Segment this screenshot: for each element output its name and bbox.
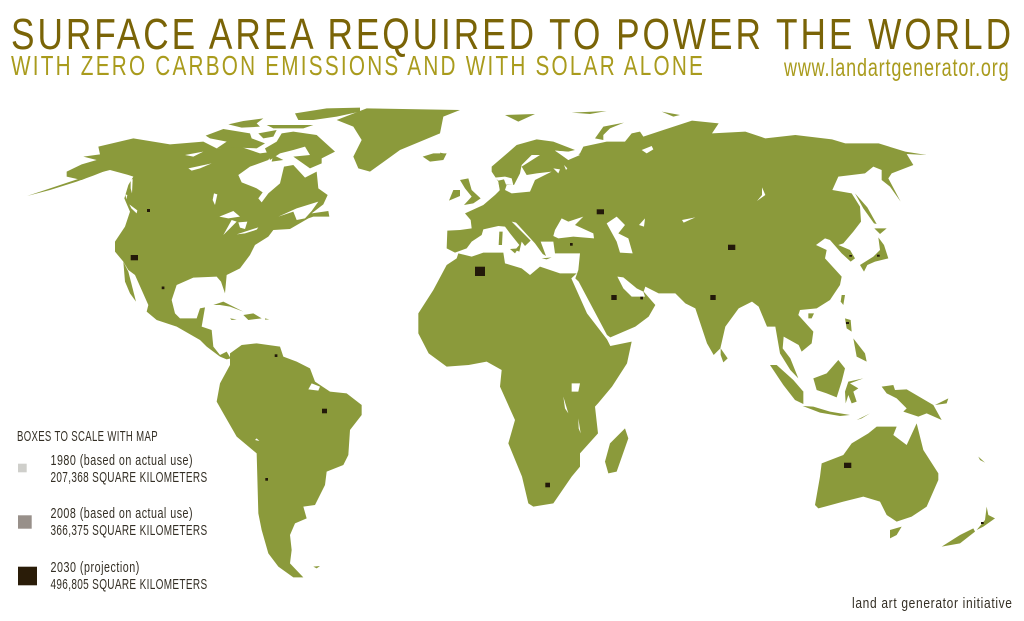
legend bbox=[17, 428, 207, 592]
Central Asian lakes bbox=[682, 187, 765, 223]
website url: www.landartgenerator.org bbox=[783, 53, 1009, 82]
subtitle: WITH ZERO CARBON EMISSIONS AND WITH SOLAR ALONE bbox=[11, 51, 703, 82]
legend swatch 2030 bbox=[18, 567, 37, 585]
legend text 1980: 1980 (based on actual use) bbox=[50, 451, 193, 468]
East Asian islands bbox=[808, 193, 888, 332]
South-East Asia and Oceania bbox=[721, 338, 995, 547]
lakes and inlets of North America bbox=[125, 152, 318, 235]
legend text 2008 bbox=[50, 504, 207, 538]
legend text 2008: 2008 (based on actual use) bbox=[50, 504, 193, 521]
legend text 2008: 366,375 SQUARE KILOMETERS bbox=[50, 522, 207, 538]
title: SURFACE AREA REQUIRED TO POWER THE WORLD bbox=[11, 10, 1011, 59]
legend text 2030: 496,805 SQUARE KILOMETERS bbox=[50, 576, 207, 592]
legend text 1980: 207,368 SQUARE KILOMETERS bbox=[50, 469, 207, 485]
legend text 2030: 2030 (projection) bbox=[50, 558, 139, 575]
footer credit: land art generator initiative bbox=[852, 595, 1012, 611]
legend text 2030 bbox=[50, 558, 207, 592]
world map bbox=[27, 108, 995, 577]
Europe seas and islands bbox=[440, 111, 680, 297]
Greenland, Iceland and the Caribbean bbox=[213, 108, 460, 320]
legend swatch 1980 bbox=[18, 464, 27, 472]
Madagascar and East African lakes bbox=[563, 383, 628, 473]
legend text 1980 bbox=[50, 451, 207, 485]
solar area boxes on the map bbox=[131, 209, 984, 524]
legend heading: BOXES TO SCALE WITH MAP bbox=[17, 428, 158, 445]
South America bbox=[217, 343, 362, 577]
Eurasia and Africa bbox=[418, 121, 927, 507]
legend swatch 2008 bbox=[18, 515, 32, 529]
North America bbox=[27, 108, 360, 359]
